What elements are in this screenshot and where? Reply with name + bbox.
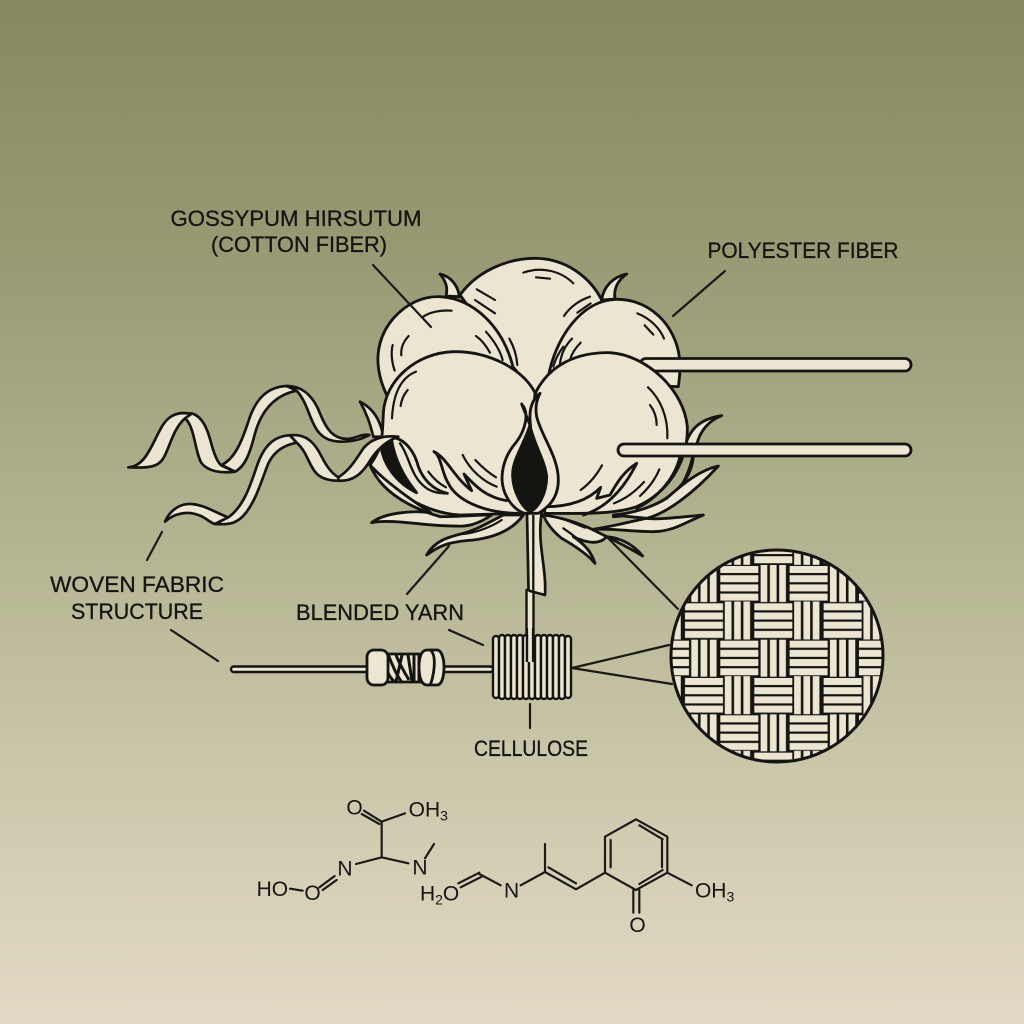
lower right sepal [543, 515, 643, 563]
label: Gossypium Hirsutum: (COTTON FIBER) [211, 232, 387, 257]
cotton ribbon fibers [128, 386, 398, 524]
chemical structure: right molecule: OH [695, 879, 726, 902]
back center lobe [460, 258, 602, 393]
curled horn right [685, 416, 722, 447]
front right lobe [533, 353, 687, 513]
back right lobe [548, 299, 680, 387]
chemical structure: right molecule: 2 [435, 892, 443, 908]
woven fabric magnified circle [670, 550, 884, 762]
lower ribbon [165, 435, 398, 524]
label: Gossypium Hirsutum [170, 206, 422, 257]
right sepal behind [613, 453, 693, 517]
chemical structure: right molecule: N [504, 879, 519, 902]
back left lobe [378, 297, 513, 395]
cotton stem [526, 513, 545, 662]
label: Woven fabric structure [50, 572, 224, 624]
back lobe detail lines [392, 270, 664, 371]
chemical structure: right molecule: H [420, 883, 435, 906]
left upper sepal [360, 402, 383, 437]
lower left sepal [427, 515, 523, 555]
small bobbin [367, 650, 444, 685]
chemical structure: left molecule: O [304, 882, 321, 905]
chemical structure: right molecule: 3 [726, 888, 734, 904]
label: Woven fabric structure: WOVEN FABRIC [50, 572, 224, 597]
chemical structure: right molecule [420, 819, 734, 937]
label: Cellulose: CELLULOSE [474, 736, 588, 761]
front left lobe [370, 352, 535, 515]
chemical structure: left molecule: 3 [440, 808, 448, 824]
chemical structure: left molecule: O [346, 796, 363, 819]
inner strokes [392, 372, 680, 552]
label: Gossypium Hirsutum: GOSSYPUM HIRSUTUM [170, 206, 422, 231]
cotton boll back [378, 258, 680, 395]
horn right [602, 274, 627, 300]
chemical structure: right molecule: O [629, 914, 646, 937]
polyester fiber: front strand [618, 444, 911, 456]
polyester fiber: rear strand [640, 358, 911, 371]
chemical structure: left molecule: OH [409, 799, 440, 822]
label: Blended yarn: BLENDED YARN [296, 600, 464, 625]
chemical structure: left molecule: N [412, 857, 427, 880]
yarn thread [231, 666, 493, 672]
far left sepal [370, 465, 492, 526]
cotton boll front lobes and sepals [370, 352, 718, 563]
label: Woven fabric structure: STRUCTURE [71, 599, 203, 624]
horn left [440, 274, 459, 297]
cotton bud [502, 393, 558, 513]
leader lines [147, 265, 725, 728]
chemical structure: left molecule [257, 796, 448, 905]
far right sepal [593, 515, 703, 532]
large yarn spool [493, 628, 571, 699]
upper ribbon [128, 386, 369, 472]
chemical structure: right molecule: O [443, 883, 459, 906]
black crescent [381, 441, 417, 493]
label: Polyester fiber: POLYESTER FIBER [708, 238, 898, 263]
right tip sepal [613, 466, 718, 518]
chemical structure: left molecule: N [337, 858, 352, 881]
chemical structure: left molecule: HO [257, 878, 288, 901]
